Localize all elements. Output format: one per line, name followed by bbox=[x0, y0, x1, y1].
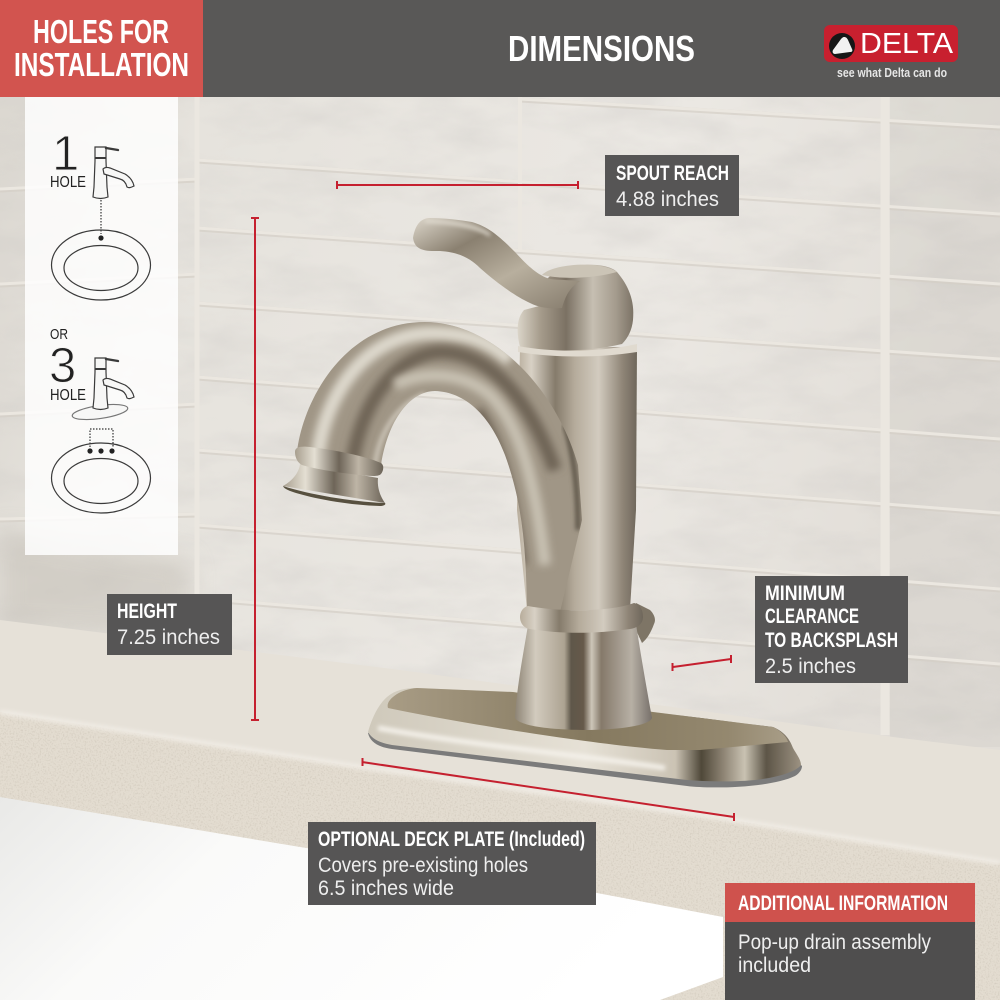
icon: three-hole basin bbox=[52, 429, 150, 513]
callout: optional deck plate bbox=[308, 822, 596, 905]
callout: minimum clearance: MINIMUM bbox=[765, 582, 845, 605]
callout: spout reach: SPOUT REACH bbox=[616, 162, 729, 185]
background: countertop bbox=[0, 620, 1000, 1000]
heading: holes for installation bbox=[0, 0, 203, 97]
deck plate bbox=[368, 688, 802, 787]
callout: spout reach bbox=[605, 155, 739, 216]
callout: height: 7.25 inches bbox=[117, 626, 220, 649]
faucet collar bbox=[520, 603, 643, 633]
one hole label bbox=[50, 127, 86, 191]
icon: three-hole faucet with plate bbox=[71, 358, 134, 422]
deck plate gasket bbox=[368, 725, 802, 787]
callout: height: HEIGHT bbox=[117, 600, 177, 623]
heading: holes for installation: HOLES FOR bbox=[33, 13, 169, 50]
logo: Delta bbox=[824, 25, 958, 80]
one hole label: 1 bbox=[52, 127, 79, 181]
header bar bbox=[0, 0, 1000, 97]
callout: additional information bbox=[725, 883, 975, 1000]
dimension: deck plate line bbox=[362, 758, 734, 821]
background: tiled wall bbox=[0, 0, 1000, 780]
icon: single-hole basin bbox=[52, 200, 150, 300]
faucet spout bbox=[283, 322, 582, 610]
logo: Delta: DELTA bbox=[860, 28, 954, 60]
heading: holes for installation: INSTALLATION bbox=[14, 46, 189, 83]
callout: additional information: Pop-up drain assembly bbox=[738, 931, 931, 954]
callout: minimum clearance: 2.5 inches bbox=[765, 655, 856, 678]
dimension: backsplash line bbox=[672, 655, 731, 671]
three hole label: OR bbox=[50, 326, 68, 343]
faucet cap bbox=[413, 218, 637, 356]
callout: minimum clearance: TO BACKSPLASH bbox=[765, 629, 898, 652]
faucet base cone bbox=[515, 624, 652, 730]
one hole label: HOLE bbox=[50, 174, 86, 191]
faucet lever at back bbox=[636, 603, 655, 643]
icon: single-hole faucet bbox=[93, 147, 134, 198]
deck plate top bbox=[388, 688, 788, 750]
logo: Delta: see what Delta can do bbox=[837, 65, 947, 80]
callout: optional deck plate: OPTIONAL DECK PLATE (Included) bbox=[318, 828, 585, 851]
faucet column bbox=[517, 347, 637, 610]
callout: optional deck plate: Covers pre-existing holes bbox=[318, 854, 528, 877]
three hole label: HOLE bbox=[50, 387, 86, 404]
callout: additional information: included bbox=[738, 954, 811, 977]
callout: minimum clearance bbox=[755, 576, 908, 683]
title: DIMENSIONS bbox=[508, 28, 695, 69]
background: white sink basin bbox=[0, 797, 723, 1000]
three hole label: 3 bbox=[49, 339, 76, 393]
callout: spout reach: 4.88 inches bbox=[616, 188, 719, 211]
panel: holes for installation bbox=[25, 97, 178, 555]
dimension: spout reach line bbox=[337, 181, 578, 189]
callout: optional deck plate: 6.5 inches wide bbox=[318, 877, 454, 900]
faucet handle bbox=[413, 218, 580, 308]
callout: minimum clearance: CLEARANCE bbox=[765, 605, 859, 628]
three hole label bbox=[49, 326, 86, 404]
callout: height bbox=[107, 594, 232, 655]
dimension: height line bbox=[251, 218, 259, 720]
spout outlet bbox=[283, 447, 385, 506]
deck plate rim bbox=[368, 688, 801, 781]
